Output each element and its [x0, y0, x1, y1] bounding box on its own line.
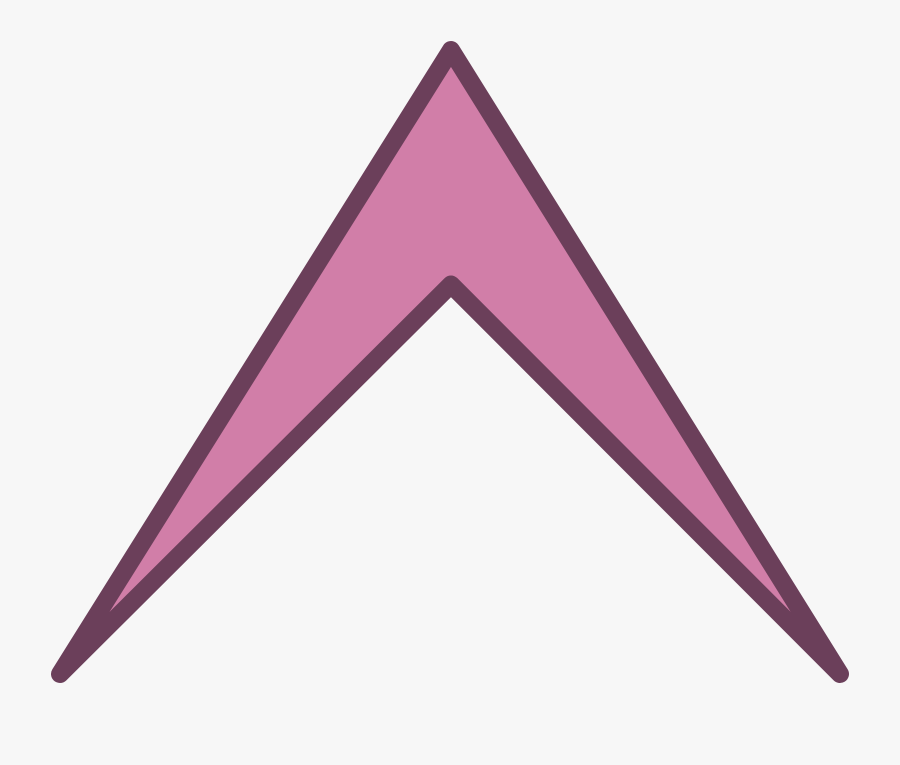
icon: chevron arrow pointing up [60, 50, 840, 674]
